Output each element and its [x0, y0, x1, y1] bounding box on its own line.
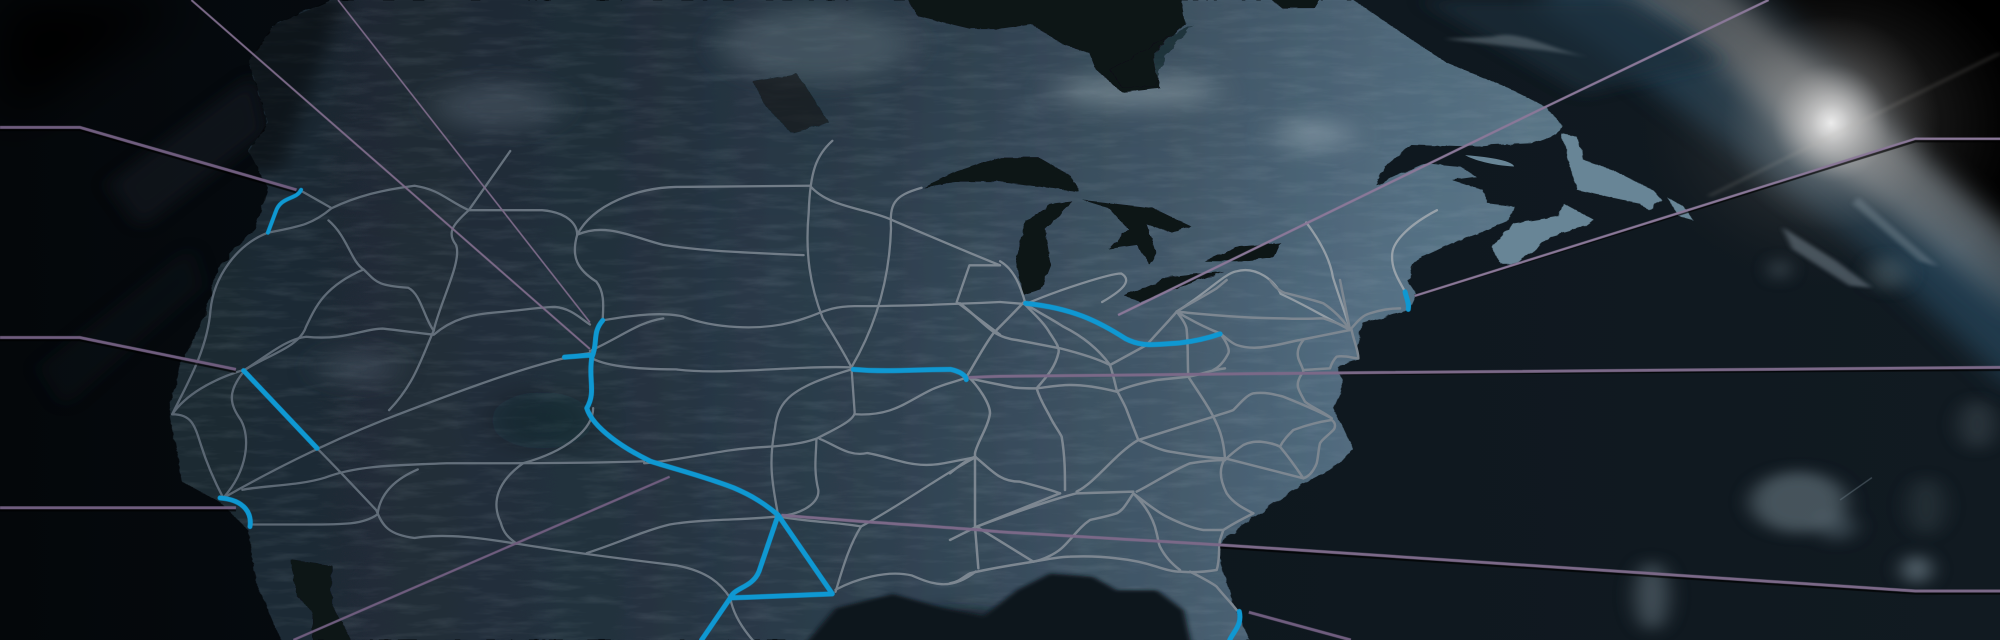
anticosti island — [1465, 155, 1514, 167]
corridor: chicago to cleveland — [1026, 303, 1220, 345]
corridor: southern california — [220, 498, 250, 527]
corridor: texas triangle — [702, 515, 832, 640]
corridor: boston — [1405, 292, 1409, 309]
northern lakes — [753, 73, 829, 133]
lake erie — [1124, 271, 1223, 302]
corridor: kansas city to st louis — [853, 369, 966, 380]
lake ontario — [1204, 243, 1281, 261]
thin cloud streak — [1840, 478, 1872, 500]
atmosphere glow along the earth limb — [1556, 0, 2000, 367]
shadows under leader lines — [0, 129, 2000, 593]
corridor: front range to texas — [564, 320, 778, 515]
north america landmass — [159, 0, 1693, 640]
space beyond the earth limb — [1760, 0, 2000, 261]
highlighted blue corridors — [220, 190, 1409, 640]
lake michigan — [1016, 202, 1073, 296]
pale cloud streaks off the west coast — [38, 73, 268, 408]
hudson bay and inland waters — [290, 0, 1320, 640]
gulf of california — [290, 559, 351, 640]
clouds over the atlantic — [1635, 257, 1996, 631]
lake huron — [1083, 200, 1191, 265]
long cloud streaks near the limb — [1782, 227, 1872, 288]
lens flare streak — [1709, 53, 2000, 196]
corridor: pacific northwest — [268, 190, 301, 233]
newfoundland and nova scotia — [1492, 133, 1693, 263]
lake superior — [922, 157, 1080, 192]
land texture — [159, 0, 1690, 640]
corridor: central florida — [1230, 611, 1240, 640]
blue tint of the ocean near the limb and northern cloud — [1422, 0, 1722, 94]
road network: west and central — [172, 141, 1437, 640]
gulf of mexico — [797, 573, 1193, 640]
corridor: california central valley — [244, 371, 317, 448]
dark space corner, upper left — [0, 0, 190, 125]
road network: east and southeast — [950, 280, 1400, 610]
